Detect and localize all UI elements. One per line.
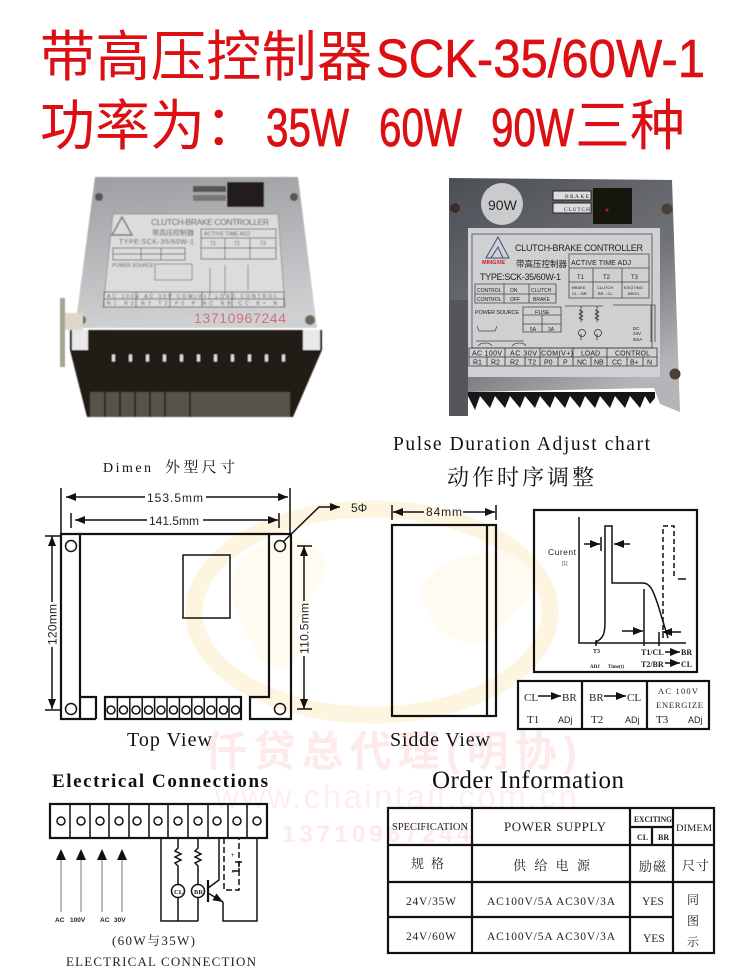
photo: 90W controller: B+: [630, 360, 639, 366]
photo: 90W controller: FUSE: [535, 310, 550, 316]
table: timing adjust: CL: [524, 692, 538, 704]
diagram: top view: 141.5mm: [149, 514, 199, 528]
photo: silver controller: AC 100V AC 30V COM(V+) LOAD CONTROL: [107, 294, 277, 300]
photo: 90W controller: DC: [633, 326, 640, 331]
photo: 90W controller: EXCITING: [624, 285, 643, 290]
photo: silver controller: T1: [210, 241, 216, 247]
diagram: electrical connections: 30V: [114, 917, 126, 924]
chart: pulse duration: [534, 510, 697, 672]
photo: 90W controller: R1: [473, 360, 482, 366]
photo: 90W controller: BR/CL: [628, 291, 641, 296]
photo: 90W controller: MINGXIE: [482, 260, 506, 266]
diagram: electrical connections: AC: [55, 917, 65, 924]
photo: 90W controller: 90W: [488, 197, 518, 213]
photo: 90W controller: ACTIVE TIME ADJ: [571, 260, 631, 267]
photo: 90W controller: POWER SOURCE: [475, 310, 519, 316]
photo: 90W controller: CL→BR: [572, 291, 587, 296]
heading: dimensions: 外型尺寸: [165, 458, 235, 476]
table: order information: BR: [658, 833, 669, 842]
chart: pulse duration: Curent: [548, 547, 577, 557]
watermark: 13710967244: [282, 821, 471, 848]
photo: silver controller: T3: [260, 241, 266, 247]
title: 60W: [379, 98, 462, 158]
diagram: electrical connections: BR: [194, 889, 203, 896]
table: order information: 24V/35W: [406, 896, 456, 908]
photo: 90W controller: NB: [594, 360, 604, 366]
photo: 90W controller: BRAKE: [572, 285, 586, 290]
heading: electrical connections: Electrical Connections: [52, 771, 268, 792]
table: order information: 供给电源: [513, 858, 591, 873]
heading: pulse duration: Pulse Duration Adjust chart: [393, 434, 651, 455]
table: order information: 尺寸: [682, 858, 709, 873]
label: top view: Top View: [127, 729, 213, 751]
heading: timing sequence: 动作时序调整: [447, 465, 594, 490]
photo: 90W controller: CLUTCH: [597, 285, 613, 290]
photo: 90W controller: 5A: [530, 327, 537, 333]
photo: 90W controller: TYPE:SCK-35/60W-1: [480, 272, 561, 282]
photo: silver controller: 13710967244: [194, 310, 286, 326]
table: order information: YES: [643, 933, 665, 945]
diagram: electrical connections: AC: [100, 917, 110, 924]
watermark: 仟贷总代理(明协): [205, 728, 577, 775]
table: timing adjust: BR: [562, 692, 577, 704]
chart: pulse duration: Time(t): [608, 665, 624, 670]
table: order information: EXCITING: [634, 815, 672, 824]
photo: 90W controller: AC 100V: [472, 350, 502, 358]
chart: pulse duration: T3: [593, 649, 600, 655]
diagram: top view: 120mm: [46, 604, 60, 645]
title: 三种: [575, 95, 685, 157]
chart: pulse duration: ADJ: [590, 665, 600, 670]
table: order information: 图: [687, 914, 699, 928]
title: [40, 26, 705, 158]
table: order information: AC100V/5A AC30V/3A: [487, 896, 616, 908]
table: timing adjust: ENERGIZE: [656, 700, 703, 710]
diagram: side view: 84mm: [426, 505, 462, 519]
photo: silver controller: [60, 177, 322, 417]
title: SCK-35/60W-1: [376, 29, 705, 89]
table: timing adjust: BR: [589, 692, 604, 704]
photo: 90W controller: CLUTCH-BRAKE CONTROLLER: [515, 243, 644, 253]
photo: 90W controller: T2: [528, 360, 536, 366]
watermark: [194, 509, 577, 848]
title: 功率为：: [40, 95, 260, 157]
title: 35W: [266, 98, 349, 158]
photo: silver controller: R1 R2 R2 T2 P0 P NC NB CC B+ N: [107, 301, 277, 307]
table: timing adjust: ADj: [688, 715, 703, 725]
photo: 90W controller: BRAKE: [533, 297, 551, 303]
photo: 90W controller: CONTROL: [477, 288, 502, 294]
photo: 90W controller: T3: [631, 275, 639, 281]
diagram: top view: 153.5mm: [147, 491, 203, 505]
photo: 90W controller: CLUTCH: [531, 288, 552, 294]
title: 带高压控制器: [40, 26, 372, 88]
table: timing adjust: ADj: [558, 715, 573, 725]
table: order information: DIMEM: [676, 824, 713, 834]
photo: silver controller: ACTIVE TIME ADJ: [204, 232, 250, 238]
photo: 90W controller: 5mA: [633, 337, 642, 342]
heading: order information: Order Information: [432, 767, 624, 794]
label: side view: Sidde View: [390, 729, 491, 751]
table: timing adjust: ADj: [625, 715, 640, 725]
photo: 90W controller: ON: [510, 288, 518, 294]
table: order information: 24V/60W: [406, 931, 456, 943]
table: order information: 示: [687, 935, 700, 949]
table: order information: 规格: [411, 856, 444, 871]
caption: 60W and 35W: (60W与35W): [112, 933, 195, 948]
heading: dimensions: Dimen: [103, 461, 151, 476]
photo: 90W controller: OFF: [510, 297, 520, 303]
photo: 90W controller: [449, 178, 680, 416]
table: timing adjust: T3: [656, 714, 669, 726]
table: order information: YES: [642, 896, 664, 908]
photo: 90W controller: CC: [612, 360, 622, 366]
photo: 90W controller: CONTROL: [477, 297, 502, 303]
photo: 90W controller: R2: [491, 360, 500, 366]
table: order information: 励磁: [639, 859, 667, 874]
table: order information: [388, 808, 714, 953]
diagram: electrical connections: 100V: [70, 917, 86, 924]
photo: 90W controller: 24V: [633, 331, 641, 336]
heading: dimensions: [103, 458, 235, 476]
chart: pulse duration: T1/CL: [641, 648, 664, 657]
watermark: www.chaintail.com.cn: [214, 778, 577, 815]
diagram: side view: [392, 505, 496, 716]
photo: silver controller: T2: [234, 241, 240, 247]
photo: 90W controller: CLUTCH: [564, 207, 590, 213]
photo: silver controller: 带高压控制器: [152, 228, 194, 237]
photo: 90W controller: T1: [577, 275, 585, 281]
title: 90W: [491, 98, 574, 158]
photo: 90W controller: LOAD: [581, 350, 600, 358]
table: timing adjust: AC 100V: [658, 686, 699, 696]
diagram: electrical connections: [50, 804, 267, 924]
photo: 90W controller: 带高压控制器: [516, 259, 568, 269]
chart: pulse duration: BR: [681, 648, 692, 657]
diagram: top view: [45, 488, 367, 719]
photo: silver controller: CLUTCH-BRAKE CONTROLLER: [151, 217, 269, 227]
chart: pulse duration: T2/BR: [641, 660, 664, 669]
table: order information: SPECIFICATION: [392, 822, 468, 833]
diagram: electrical connections: +: [231, 853, 235, 859]
photo: 90W controller: CONTROL: [615, 350, 650, 358]
photo: 90W controller: T2: [603, 275, 611, 281]
photo: silver controller: TYPE:SCK-35/60W-1: [119, 239, 194, 246]
diagram: electrical connections: CL: [174, 889, 184, 896]
table: timing adjust: [518, 681, 709, 729]
photo: 90W controller: NC: [577, 360, 587, 366]
photo: 90W controller: P: [563, 360, 568, 366]
photo: 90W controller: N: [647, 360, 652, 366]
photo: 90W controller: AC 30V: [510, 350, 537, 358]
photo: 90W controller: COM(V+): [541, 350, 573, 358]
table: order information: 同: [687, 893, 699, 907]
table: order information: AC100V/5A AC30V/3A: [487, 931, 616, 943]
chart: pulse duration: CL: [681, 660, 692, 669]
photo: 90W controller: 3A: [548, 327, 555, 333]
diagram: top view: 5Φ: [351, 501, 367, 515]
photo: 90W controller: R2: [510, 360, 519, 366]
photo: 90W controller: BR→CL: [598, 291, 613, 296]
diagram: electrical connections: −: [231, 870, 235, 876]
photo: 90W controller: BRAKE: [565, 194, 590, 200]
table: timing adjust: CL: [627, 692, 641, 704]
photo: 90W controller: P0: [544, 360, 553, 366]
diagram: top view: 110.5mm: [298, 603, 312, 654]
caption: electrical connection: ELECTRICAL CONNECTION: [66, 954, 257, 969]
chart: pulse duration: [1]: [562, 561, 568, 567]
photo: silver controller: POWER SOURCE: [112, 263, 154, 269]
table: order information: CL: [637, 833, 648, 842]
table: order information: POWER SUPPLY: [504, 819, 607, 834]
table: timing adjust: T1: [527, 714, 539, 726]
table: timing adjust: T2: [591, 714, 603, 726]
